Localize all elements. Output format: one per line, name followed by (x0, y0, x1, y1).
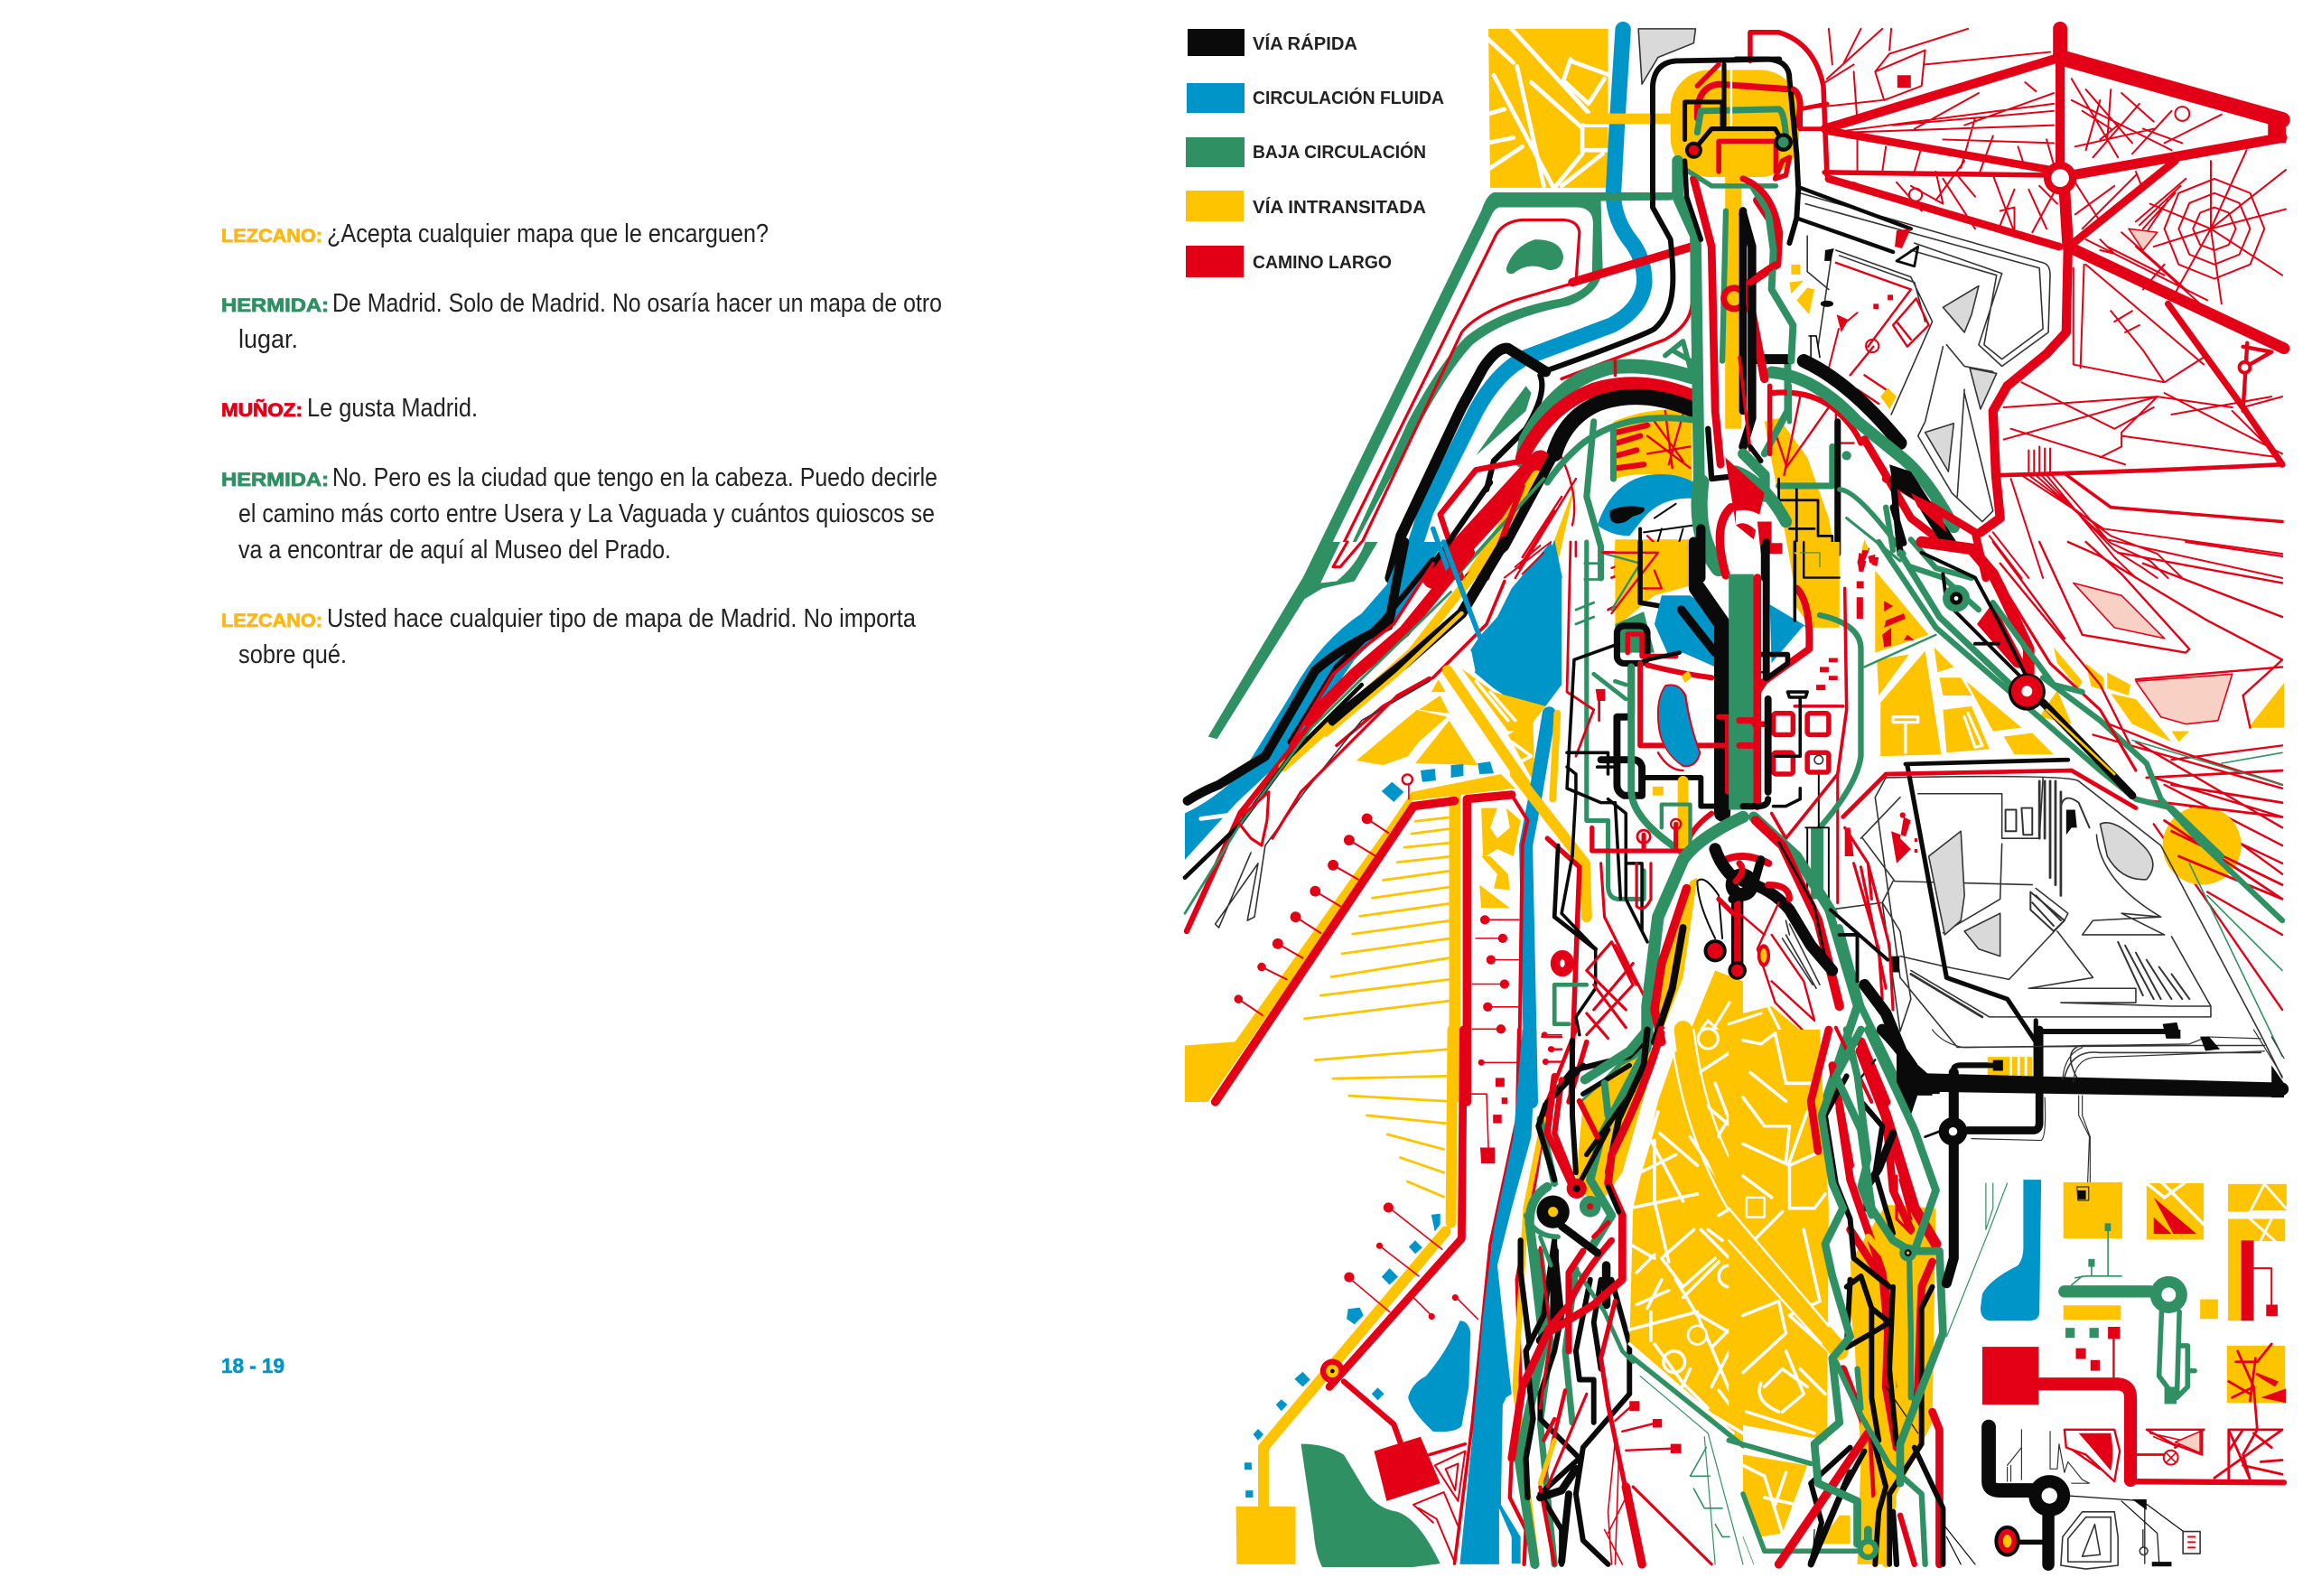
turn: Lezcano concludes (221, 604, 917, 669)
turn: Hermida explains: HERMIDA: (221, 470, 329, 490)
turn: Hermida answers: lugar. (238, 325, 298, 354)
turn: Hermida answers: HERMIDA: (221, 295, 329, 316)
legend item: baja circulación: BAJA CIRCULACIÓN (1253, 141, 1426, 163)
legend item: circulación fluida: CIRCULACIÓN FLUIDA (1253, 87, 1444, 108)
legend item: vía rápida (1188, 29, 1357, 56)
body-shaped road map (1185, 27, 2287, 1569)
turn: Lezcano asks: ¿Acepta cualquier mapa que le encarguen? (327, 219, 769, 248)
legend item: vía intransitada (1186, 191, 1426, 221)
map: lower left, road, lake and legs (1236, 1029, 1743, 1567)
map: upper right, red web district (1725, 29, 2286, 578)
turn: Lezcano concludes: LEZCANO: (221, 611, 322, 631)
legend item: camino largo (1186, 246, 1392, 277)
page number: 18 - 19 (221, 1354, 284, 1377)
turn: Hermida explains: el camino más corto entre Usera y La Vaguada y cuántos quioscos se (238, 499, 935, 528)
turn: Hermida explains (221, 463, 937, 565)
turn: Lezcano concludes: Usted hace cualquier tipo de mapa de Madrid. No importa (327, 604, 917, 633)
legend item: baja circulación (1186, 137, 1426, 167)
legend (1186, 29, 1444, 277)
legend item: vía intransitada: VÍA INTRANSITADA (1253, 197, 1426, 218)
dialogue text (221, 219, 942, 669)
map: middle right, airport and lower red lines (1729, 542, 2284, 1102)
turn: Hermida explains: No. Pero es la ciudad que tengo en la cabeza. Puedo decirle (332, 463, 937, 492)
turn: Lezcano concludes: sobre qué. (238, 640, 347, 669)
turn: Lezcano asks: LEZCANO: (221, 226, 322, 247)
turn: Muñoz (221, 394, 478, 423)
turn: Hermida explains: va a encontrar de aquí al Museo del Prado. (238, 536, 671, 565)
turn: Muñoz: MUÑOZ: (221, 400, 303, 421)
turn: Hermida answers (221, 289, 942, 354)
legend item: camino largo: CAMINO LARGO (1253, 253, 1392, 273)
turn: Hermida answers: De Madrid. Solo de Madrid. No osaría hacer un mapa de otro (332, 289, 942, 318)
map: upper left, head and shoulder (1302, 27, 1800, 578)
map: middle left, river, yellow road and bundle (1185, 542, 1768, 1102)
turn: Muñoz: Le gusta Madrid. (307, 394, 478, 423)
map: lower right, legs, black road and small diagrams (1729, 1030, 2287, 1569)
legend item: vía rápida: VÍA RÁPIDA (1253, 33, 1357, 54)
legend item: circulación fluida (1187, 83, 1444, 113)
